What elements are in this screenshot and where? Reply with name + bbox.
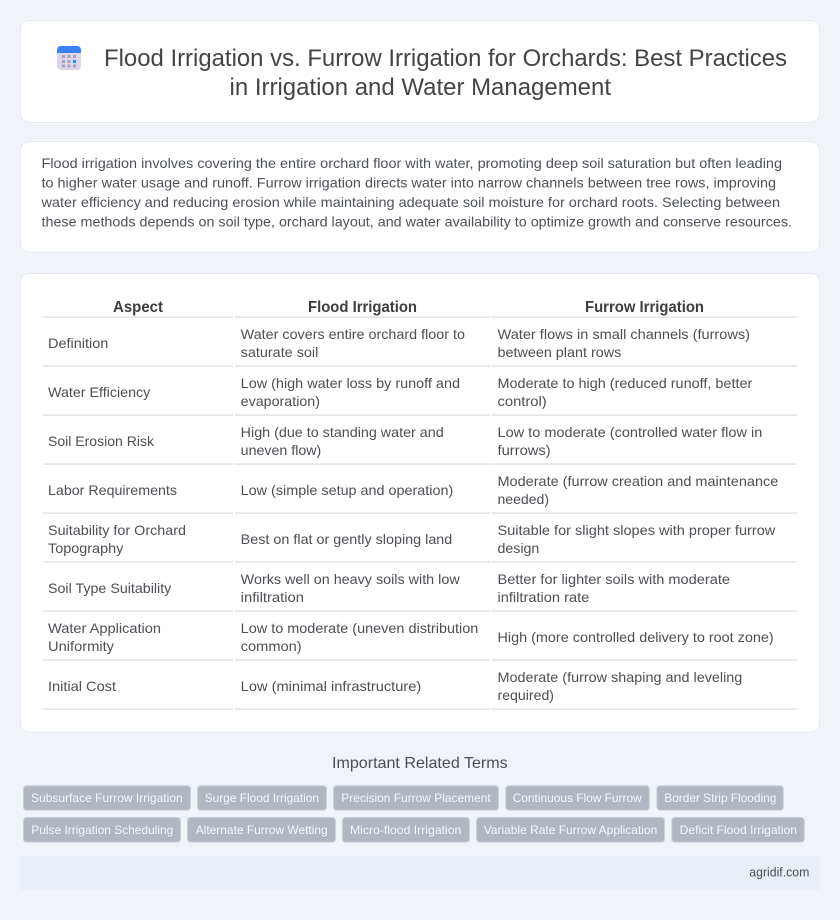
- panel: introduction text: [20, 142, 820, 252]
- row: labor requirements: needed): [498, 491, 549, 507]
- row: soil erosion risk: [48, 424, 762, 458]
- title: in Irrigation and Water Management: [230, 74, 611, 101]
- title: Flood Irrigation vs. Furrow Irrigation for Orchards: Best Practices: [104, 45, 787, 72]
- row: water application uniformity: common): [241, 638, 302, 654]
- related term tags: Continuous Flow Furrow: [513, 791, 642, 805]
- panel: introduction text: Flood irrigation involves covering the entire orchard floor with water, promoting deep soil saturation but often leading: [42, 155, 782, 171]
- row: soil erosion risk: uneven flow): [241, 442, 321, 458]
- icon: calendar: [57, 46, 81, 70]
- row: water application uniformity: Water Application: [48, 620, 161, 636]
- row: water efficiency: control): [498, 393, 547, 409]
- row: definition: Water flows in small channels (furrows): [498, 326, 750, 342]
- panel: introduction text: to higher water usage and runoff. Furrow irrigation directs water into narrow channels between tree rows, improving: [42, 174, 776, 190]
- table header row: Aspect: [113, 299, 164, 316]
- row: soil erosion risk: High (due to standing water and: [241, 424, 444, 440]
- related term tags: Variable Rate Furrow Application: [484, 823, 657, 837]
- row: definition: Water covers entire orchard floor to: [241, 326, 465, 342]
- row: definition: saturate soil: [241, 344, 318, 360]
- row: suitability for orchard topography: Suitability for Orchard: [48, 522, 186, 538]
- row: soil erosion risk: Low to moderate (controlled water flow in: [498, 424, 762, 440]
- row: soil type suitability: Works well on heavy soils with low: [241, 571, 461, 587]
- row: water efficiency: Moderate to high (reduced runoff, better: [498, 375, 753, 391]
- row: labor requirements: Low (simple setup and operation): [241, 482, 453, 498]
- related term tags: Pulse Irrigation Scheduling: [31, 823, 173, 837]
- row: water efficiency: Low (high water loss by runoff and: [241, 375, 460, 391]
- row: water efficiency: evaporation): [241, 393, 320, 409]
- row: definition: Definition: [48, 335, 108, 351]
- row: initial cost: Initial Cost: [48, 678, 116, 694]
- row: soil type suitability: Soil Type Suitability: [48, 580, 171, 596]
- panel: introduction text: these methods depends on soil type, orchard layout, and water availability to optimize growth and conserve resources.: [42, 214, 792, 230]
- row: soil type suitability: [48, 571, 730, 605]
- row: initial cost: Low (minimal infrastructure): [241, 678, 421, 694]
- row: suitability for orchard topography: Best on flat or gently sloping land: [241, 531, 452, 547]
- row: water application uniformity: Low to moderate (uneven distribution: [241, 620, 478, 636]
- row: soil erosion risk: Soil Erosion Risk: [48, 433, 155, 449]
- heading: important related terms: Important Related Terms: [332, 755, 508, 772]
- footer bar: [20, 856, 820, 890]
- related term tags: Border Strip Flooding: [664, 791, 776, 805]
- row: soil type suitability: infiltration: [241, 589, 304, 605]
- related term tags: Micro-flood Irrigation: [350, 823, 461, 837]
- table header row: Flood Irrigation: [308, 299, 417, 316]
- row: definition: [48, 326, 750, 360]
- row: water efficiency: Water Efficiency: [48, 384, 150, 400]
- table header row: Furrow Irrigation: [585, 299, 704, 316]
- row: water application uniformity: Uniformity: [48, 638, 114, 654]
- related term tags: Subsurface Furrow Irrigation: [31, 791, 183, 805]
- row: water application uniformity: [48, 620, 774, 654]
- row: definition: between plant rows: [498, 344, 621, 360]
- row: soil type suitability: Better for lighter soils with moderate: [498, 571, 730, 587]
- row: water application uniformity: High (more controlled delivery to root zone): [498, 629, 774, 645]
- row: suitability for orchard topography: design: [498, 540, 539, 556]
- panel: introduction text: water efficiency and reducing erosion while maintaining adequate soil moisture for orchard roots. Selecting between: [40, 194, 780, 210]
- row: initial cost: [48, 669, 742, 703]
- related term tags: Alternate Furrow Wetting: [196, 823, 328, 837]
- row: soil erosion risk: furrows): [498, 442, 551, 458]
- row: suitability for orchard topography: [48, 522, 776, 556]
- row: labor requirements: [48, 473, 779, 507]
- row: water efficiency: [48, 375, 753, 409]
- row: labor requirements: Moderate (furrow creation and maintenance: [498, 473, 779, 489]
- title: [104, 45, 787, 101]
- row: soil type suitability: infiltration rate: [498, 589, 590, 605]
- row: labor requirements: Labor Requirements: [48, 482, 177, 498]
- related term tags: Precision Furrow Placement: [341, 791, 491, 805]
- row: suitability for orchard topography: Topography: [48, 540, 123, 556]
- footer bar: agridif.com: [749, 865, 809, 880]
- row: initial cost: required): [498, 687, 554, 703]
- row: suitability for orchard topography: Suitable for slight slopes with proper furrow: [498, 522, 776, 538]
- related term tags: Deficit Flood Irrigation: [680, 823, 797, 837]
- related term tags: Surge Flood Irrigation: [205, 791, 319, 805]
- related term tags: [24, 786, 804, 842]
- row: initial cost: Moderate (furrow shaping and leveling: [498, 669, 742, 685]
- table header row: [113, 299, 704, 316]
- panel: title header: [20, 20, 820, 122]
- panel: comparison table: [20, 274, 820, 732]
